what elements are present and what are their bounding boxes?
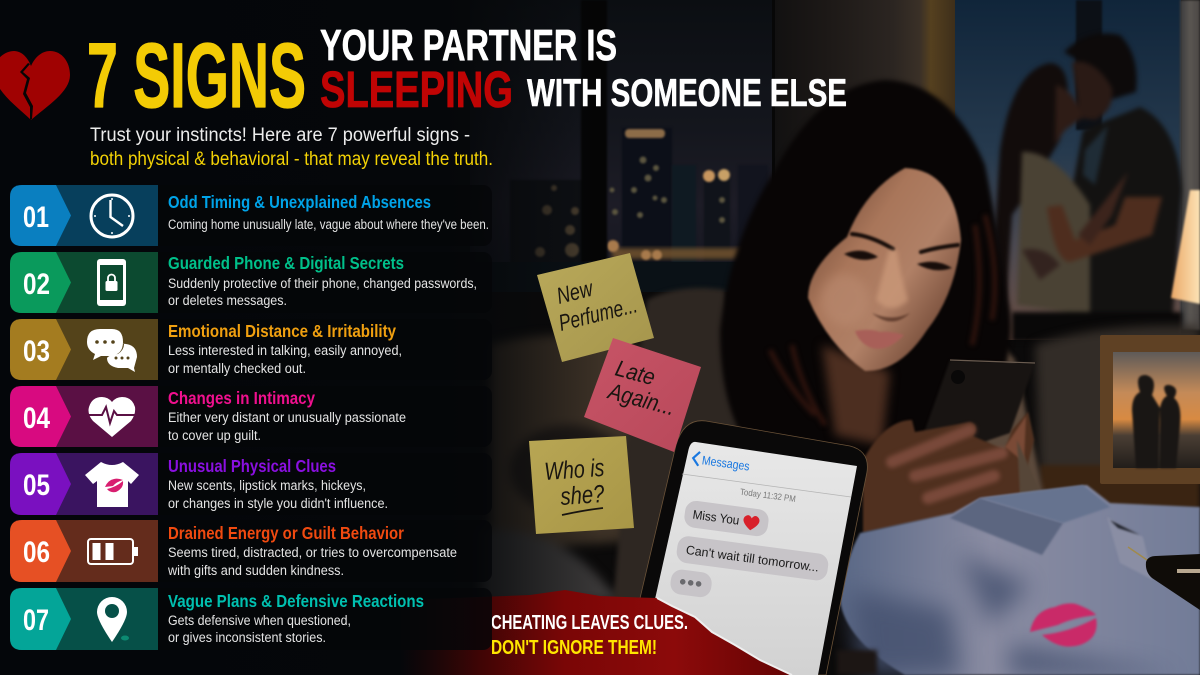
sticky note: who is she <box>529 436 634 534</box>
night window with city skyline <box>470 0 775 292</box>
sticky note: late again <box>584 338 701 452</box>
panel: sign 02: Guarded Phone & Digital Secrets <box>168 253 404 273</box>
panel: sign 05: New scents, lipstick marks, hickeys, <box>168 478 366 494</box>
back chevron <box>692 451 700 466</box>
bubble: can't wait: Can't wait till tomorrow... <box>685 543 820 575</box>
panel: sign 03: Less interested in talking, easily annoyed, <box>168 343 402 359</box>
icon: chat bubbles <box>87 329 137 372</box>
icon: map pin <box>97 597 129 642</box>
shirt with lipstick mark <box>840 485 1200 675</box>
woman's sweater <box>610 288 1045 640</box>
sticky note: new perfume <box>537 253 654 362</box>
title <box>87 21 847 127</box>
bubble: can't wait <box>675 535 830 582</box>
header divider <box>682 474 851 497</box>
panel: sign 03: Emotional Distance & Irritability <box>168 321 396 341</box>
title: 7 signs: 7 SIGNS <box>87 25 306 127</box>
shirt collar front <box>950 498 1063 555</box>
panel: sign 02 <box>10 252 492 313</box>
title: your partner is: YOUR PARTNER IS <box>320 21 617 70</box>
night table glow and bedding <box>1035 325 1200 510</box>
panel: sign 07: Vague Plans & Defensive Reactions <box>168 591 424 611</box>
panel: sign 03 <box>10 319 492 380</box>
icon: locked phone <box>97 259 126 306</box>
torn paper edge <box>657 598 792 675</box>
panel: sign 06: Seems tired, distracted, or tries to overcompensate <box>168 545 457 561</box>
brows <box>852 234 958 252</box>
panel: sign 04: to cover up guilt. <box>168 428 261 444</box>
panel: sign 02: 02 <box>23 268 50 301</box>
panel: sign 06: Drained Energy or Guilt Behavior <box>168 523 404 543</box>
panel: sign 02: Suddenly protective of their phone, changed passwords, <box>168 276 477 292</box>
right curtain <box>1180 0 1200 330</box>
lipstick kiss <box>1030 603 1097 647</box>
eyes <box>844 251 952 270</box>
icon: t-shirt with lips <box>85 462 139 507</box>
panel: sign 03: 03 <box>23 335 50 368</box>
torn red banner <box>400 590 792 675</box>
panel: sign 01: Odd Timing & Unexplained Absences <box>168 192 431 212</box>
panel: sign 04 <box>10 386 492 447</box>
dusk window <box>955 0 1181 340</box>
panel: sign 05: Unusual Physical Clues <box>168 456 336 476</box>
panel: sign 06: with gifts and sudden kindness. <box>167 563 344 579</box>
icon: red heart <box>742 515 760 531</box>
sticky note: new perfume: New <box>554 275 596 309</box>
panel: sign 01: Coming home unusually late, vague about where they've been. <box>168 217 489 233</box>
dark lower left of shirt <box>837 650 877 675</box>
woman's hair <box>720 80 1011 480</box>
window mullion <box>1076 0 1102 130</box>
nose shadow <box>872 313 910 322</box>
lips <box>855 330 904 349</box>
timestamp: Today 11:32 PM <box>740 487 796 504</box>
title: with someone else: WITH SOMEONE ELSE <box>527 72 847 115</box>
panel: sign 07: 07 <box>23 604 49 637</box>
icon: broken heart <box>0 51 70 120</box>
panel: sign 07 <box>10 588 492 650</box>
icon: clock <box>91 195 133 237</box>
nose highlight <box>876 250 908 308</box>
shirt collar back <box>980 485 1110 523</box>
sticky note: late again: Late <box>613 355 658 390</box>
lamp <box>1171 190 1200 304</box>
woman's neck and face <box>808 168 961 445</box>
curtain wall <box>775 0 956 320</box>
panel: sign 04: Changes in Intimacy <box>168 388 315 408</box>
callout line two: DON'T IGNORE THEM! <box>491 637 657 659</box>
panel: sign 04: Either very distant or unusually passionate <box>168 410 406 426</box>
panel: sign 01 <box>10 185 492 246</box>
panel: sign 05: or changes in style you didn't influence. <box>168 496 388 512</box>
phone screen <box>638 442 857 675</box>
panel: sign 07: or gives inconsistent stories. <box>168 630 326 646</box>
picture frame with couple photo <box>1100 335 1200 484</box>
title: sleeping: SLEEPING <box>320 61 513 118</box>
callout line one: CHEATING LEAVES CLUES. <box>491 612 688 634</box>
sticky note: who is she: she? <box>559 480 605 511</box>
icon: heart with pulse <box>88 397 135 437</box>
bedroom couple silhouette <box>995 33 1182 342</box>
dark fade to the left text column <box>0 0 600 675</box>
bubble: miss you: Miss You <box>692 508 740 528</box>
shirt placket <box>1107 517 1153 580</box>
sticky note: new perfume: Perfume... <box>556 291 640 336</box>
messages tilted content <box>669 450 841 613</box>
bubble: typing indicator <box>669 568 713 599</box>
subtitle line two: both physical & behavioral - that may reveal the truth. <box>90 149 493 170</box>
cheek light <box>821 274 869 326</box>
key fob <box>1128 547 1200 610</box>
woman's hand <box>863 412 1043 533</box>
panel: sign 02: or deletes messages. <box>168 293 287 309</box>
panel: sign 05 <box>10 453 492 515</box>
panel: sign 06: 06 <box>23 536 50 569</box>
sofa and bedding on left <box>480 335 650 605</box>
panel: sign 07: Gets defensive when questioned, <box>168 613 351 629</box>
bubble: miss you <box>683 500 770 537</box>
messages header label: Messages <box>701 453 750 474</box>
sticky note: who is she: Who is <box>543 454 605 486</box>
panel: sign 06 <box>10 520 492 582</box>
panel: sign 04: 04 <box>23 402 50 435</box>
subtitle <box>90 125 493 170</box>
icon: low battery <box>88 539 138 564</box>
subtitle line one: Trust your instincts! Here are 7 powerful signs - <box>90 125 470 146</box>
sticky note: late again: Again... <box>604 377 678 420</box>
held phone back <box>912 360 1035 466</box>
panel: sign 03: or mentally checked out. <box>168 361 306 377</box>
panel: sign 01: 01 <box>23 201 49 234</box>
window frame bars <box>581 0 776 285</box>
panel: sign 05: 05 <box>23 469 50 502</box>
front smartphone <box>622 421 867 675</box>
